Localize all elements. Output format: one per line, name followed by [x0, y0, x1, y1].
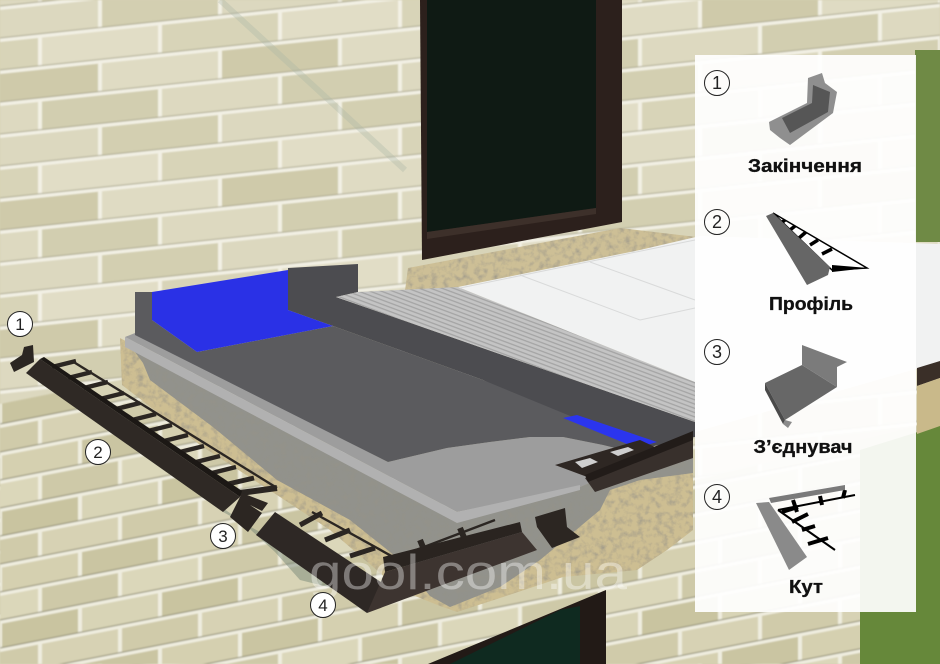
legend number 4: 4	[712, 487, 722, 507]
dark membrane floor	[135, 292, 640, 462]
lower brick wall	[0, 378, 940, 664]
marker 1: 1	[15, 315, 25, 334]
watermark: gool.com.ua	[309, 546, 628, 600]
icon: end cap	[769, 73, 837, 145]
glass reflection on wall	[220, 0, 405, 170]
corrugated drainage layer	[336, 287, 695, 422]
marker 2	[86, 440, 110, 464]
exploded ladder profile	[26, 357, 277, 512]
sand screed layer	[120, 338, 693, 612]
legend number 3	[704, 340, 730, 364]
balcony slab	[125, 333, 695, 523]
legend number 1: 1	[712, 73, 722, 93]
label: corner: Кут	[789, 577, 823, 597]
grass background right	[860, 50, 940, 664]
upper window	[420, 0, 622, 260]
panel: parts legend	[695, 55, 916, 612]
legend number 2: 2	[712, 212, 722, 232]
marker 2: 2	[93, 443, 103, 462]
legend number 2	[704, 210, 730, 234]
marker 3	[210, 524, 236, 548]
legend number 3: 3	[712, 342, 722, 362]
label: connector: З’єднувач	[754, 437, 852, 457]
exploded connector	[230, 493, 268, 532]
marker 4: 4	[318, 596, 328, 615]
balcony edge right side	[917, 361, 940, 434]
label: profile: Профіль	[769, 294, 853, 314]
lower window	[428, 590, 606, 664]
blue waterproofing area	[152, 270, 333, 352]
concrete base	[130, 345, 693, 607]
legend number 1	[704, 70, 730, 96]
window sill	[405, 228, 705, 291]
installed edge profile	[555, 431, 693, 492]
icon: profile	[766, 213, 868, 285]
exploded corner profile	[256, 512, 537, 613]
blue waterproofing strip	[563, 415, 657, 448]
icon: connector	[765, 345, 847, 428]
legend number 4	[704, 484, 730, 510]
marker 1	[8, 312, 32, 336]
white floor tiles	[458, 236, 940, 432]
label: end cap: Закінчення	[748, 156, 862, 176]
shadow of profiles on wall	[26, 373, 367, 614]
icon: corner	[756, 485, 855, 570]
marker 4	[310, 592, 336, 618]
dark membrane band	[288, 264, 695, 452]
profile end piece in place	[10, 345, 34, 372]
marker 3: 3	[218, 527, 228, 546]
exploded connector right	[535, 508, 580, 548]
